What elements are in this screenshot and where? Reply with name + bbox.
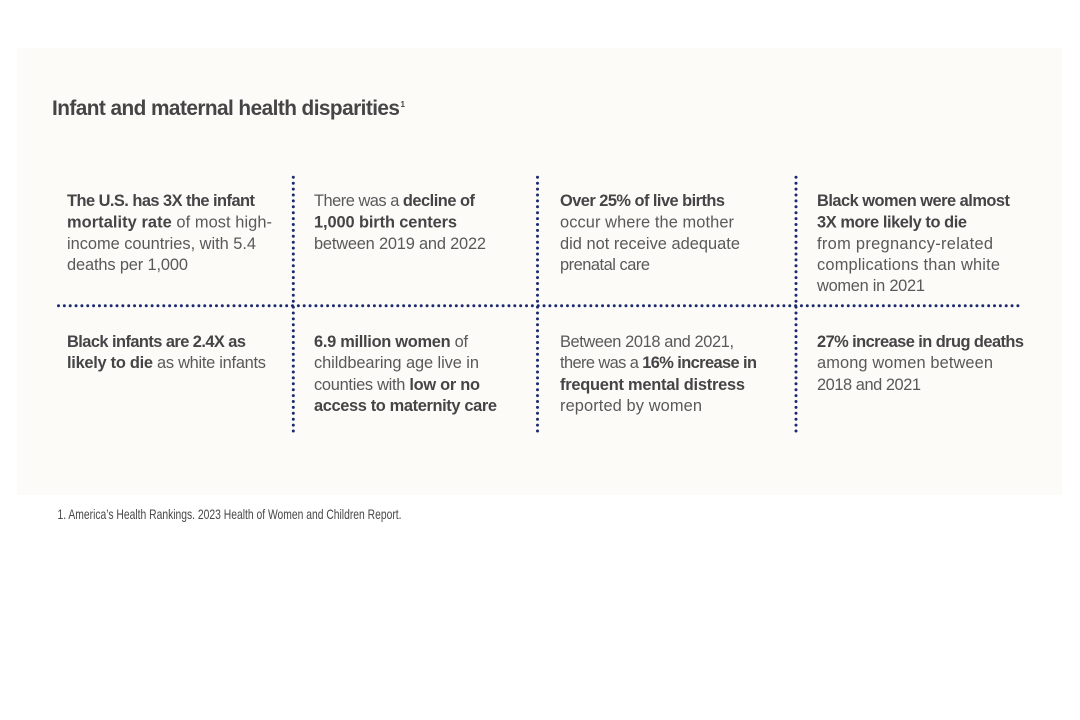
stat: Black infants: [67, 333, 266, 372]
stat: maternity care access: access to maternity care: [314, 397, 497, 415]
stat: birth centers decline: There was a decline of: [314, 192, 476, 210]
stat: infant mortality rate: mortality rate of most high-: [67, 214, 272, 232]
stat: prenatal care: [560, 192, 740, 274]
stat: drug deaths: 2018 and 2021: [817, 376, 921, 394]
stat: Black infants: Black infants are 2.4X as: [67, 333, 246, 351]
stat: infant mortality rate: deaths per 1,000: [67, 256, 188, 274]
stat: Black women pregnancy-related deaths: 3X more likely to die: [817, 214, 967, 232]
stat: birth centers decline: between 2019 and 2022: [314, 235, 486, 253]
stat: infant mortality rate: [67, 192, 272, 274]
stat: birth centers decline: [314, 192, 486, 253]
stat: prenatal care: prenatal care: [560, 256, 650, 274]
stat: Black infants: likely to die as white infants: [67, 354, 266, 372]
stat: mental distress: [560, 333, 757, 415]
stat: maternity care access: childbearing age live in: [314, 354, 479, 372]
footnote: 1. America’s Health Rankings. 2023 Health of Women and Children Report.: [58, 506, 402, 522]
stat: prenatal care: Over 25% of live births: [560, 192, 725, 210]
title: 1: [400, 100, 406, 109]
stat: Black women pregnancy-related deaths: Black women were almost: [817, 192, 1011, 210]
stat: infant mortality rate: income countries, with 5.4: [67, 235, 256, 253]
title: Infant and maternal health disparities: [52, 97, 400, 120]
stat: prenatal care: did not receive adequate: [560, 235, 740, 253]
stat: Black women pregnancy-related deaths: women in 2021: [816, 277, 925, 295]
stat: mental distress: frequent mental distress: [560, 376, 745, 394]
stat: Black women pregnancy-related deaths: [816, 192, 1011, 295]
stat: prenatal care: occur where the mother: [560, 214, 735, 232]
stat: birth centers decline: 1,000 birth centers: [314, 214, 457, 232]
stat: mental distress: reported by women: [560, 397, 702, 415]
stat: maternity care access: counties with low or no: [314, 376, 480, 394]
stat: mental distress: Between 2018 and 2021,: [560, 333, 734, 351]
stat: infant mortality rate: The U.S. has 3X the infant: [67, 192, 256, 210]
stat: drug deaths: [817, 333, 1024, 394]
stat: drug deaths: 27% increase in drug deaths: [817, 333, 1024, 351]
panel: background: [17, 48, 1062, 495]
stat: maternity care access: [314, 333, 497, 415]
stat: drug deaths: among women between: [817, 354, 993, 372]
dotted grid dividers: [58, 177, 1018, 432]
stat: mental distress: there was a 16% increase in: [560, 354, 757, 372]
stat: maternity care access: 6.9 million women of: [314, 333, 468, 351]
stat: Black women pregnancy-related deaths: complications than white: [817, 256, 1000, 274]
stat: Black women pregnancy-related deaths: from pregnancy-related: [817, 235, 993, 253]
